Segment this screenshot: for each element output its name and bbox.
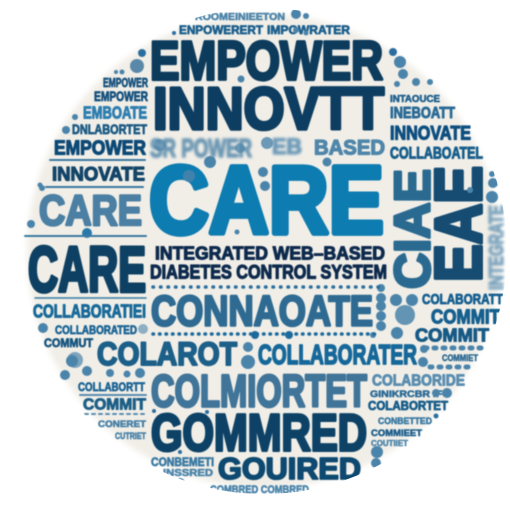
word: COLLABORTT: COLLABORTT (78, 380, 146, 394)
word: CONERET: CONERET (98, 419, 146, 430)
word: COLLABORATER: COLLABORATER (258, 339, 417, 370)
right column words (368, 94, 508, 448)
word: COLLABORATED: COLLABORATED (55, 323, 137, 337)
word: ROOMEINI: ROOMEINIEETON (195, 12, 285, 23)
word: CONNAOATE: CONNAOATE (151, 288, 373, 336)
word: COMMUT: COMMUT (44, 338, 93, 350)
word: COMBRED bottom: COMBRED COMBRED (210, 484, 309, 496)
word: COLABORTET: COLABORTET (368, 399, 448, 413)
word: BASED: BASED (314, 135, 385, 159)
word: INNOVTT headline: INNOVTT (153, 76, 384, 142)
word: INNOVATE right: INNOVATE (390, 122, 471, 144)
word: INEBOATT: INEBOATT (390, 105, 455, 122)
left column words (28, 75, 214, 479)
word: INSSRED: INSSRED (163, 468, 213, 479)
small word: EMPOWER: EMPOWER (103, 75, 148, 90)
word: COMMIEET: COMMIEET (371, 428, 422, 439)
word: COMMIT lower: COMMIT (415, 324, 490, 346)
word: INTAOUCE: INTAOUCE (390, 94, 440, 105)
word: COMMIT upper: COMMIT (431, 306, 500, 328)
rotated word: CIAE: CIAE (384, 169, 440, 289)
word: CONBETTED: CONBETTED (378, 416, 432, 427)
small word: EMBOATE: EMBOATE (83, 102, 147, 122)
rotated strip of small text: INTEGRATE (486, 205, 508, 290)
word: COLMIORTET: COLMIORTET (151, 366, 367, 417)
word: CONBEMETI: CONBEMETI (151, 455, 214, 469)
word: COLLABORATIEI: COLLABORATIEI (33, 300, 146, 322)
word: INNOVATE left: INNOVATE (52, 164, 145, 186)
word: COLAROT: COLAROT (97, 336, 237, 372)
subtitle line one: INTEGRATED WEB–BASED (155, 242, 385, 264)
word: COUTIIET: COUTIIET (371, 438, 409, 448)
word: CARE main title: CARE (149, 147, 384, 254)
word: EMPOWERERT: ENPOWERERT (179, 25, 263, 37)
small word: EMPOWER second: EMPOWER (94, 89, 148, 104)
word: GINIKRCBR: GINIKRCBR IFC (370, 389, 450, 400)
word: CUTRIET: CUTRIET (115, 431, 146, 442)
word: CARE left dark: CARE (28, 234, 146, 306)
word: IMPOWRATER: IMPOWRATER (267, 23, 350, 37)
small word: DNLABORTET: DNLABORTET (72, 121, 147, 137)
rotated word: EAE: EAE (421, 166, 495, 282)
word: GOUIRED: GOUIRED (218, 452, 361, 486)
dotted divider rows (25, 160, 485, 414)
word: COMMIT: COMMIT (83, 396, 147, 414)
word: GOMMRED: GOMMRED (151, 404, 367, 462)
word: EMPOWER headline: EMPOWER (150, 29, 383, 91)
top words (179, 12, 350, 37)
word: COLABORIDE: COLABORIDE (372, 372, 465, 390)
word: CARE left light: CARE (39, 187, 142, 235)
blurred phrase: EB: EB (272, 134, 302, 159)
word: EMPOWER left: EMPOWER (54, 138, 146, 160)
subtitle line two: DIABETES CONTROL SYSTEM (150, 262, 387, 283)
word: COMMIET: COMMIET (442, 353, 478, 363)
blurred phrase: POWER: SR POWER (150, 133, 252, 163)
